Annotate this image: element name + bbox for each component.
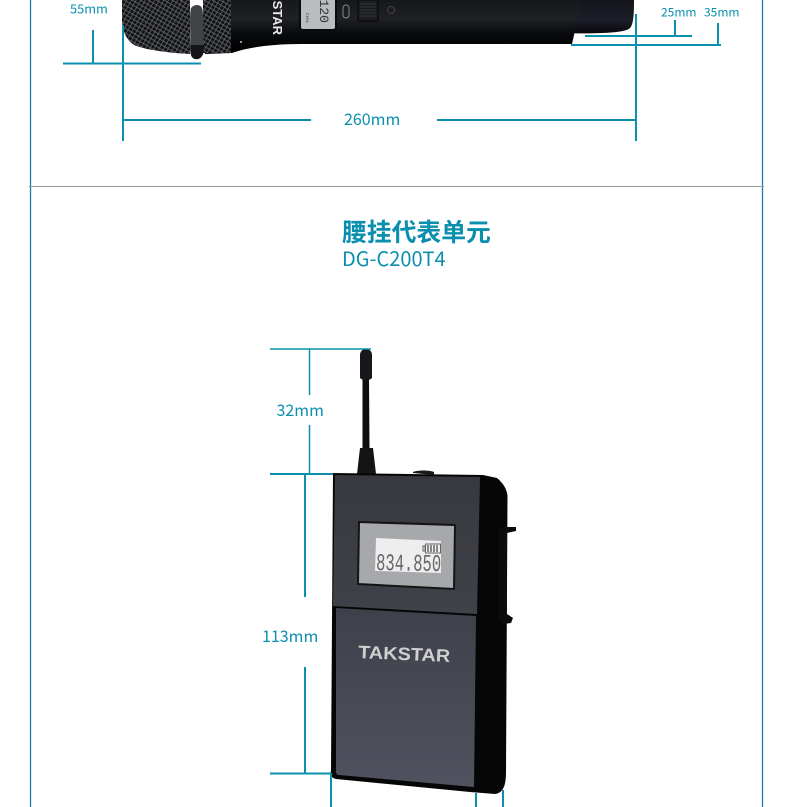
- microphone clasp: [190, 5, 204, 59]
- microphone handle: [205, 0, 582, 54]
- pack upper front: [333, 475, 480, 614]
- dimension: 260mm: [123, 14, 636, 141]
- heading: [342, 213, 491, 272]
- pack side: [331, 473, 508, 794]
- belt clip: [499, 527, 516, 624]
- LCD frequency: 834.850: [376, 551, 441, 579]
- LCD screen: [375, 538, 441, 573]
- dimension: 25mm: 25mm: [661, 4, 697, 20]
- LCD panel: [358, 522, 455, 589]
- dimension: 25mm: [585, 4, 697, 36]
- bodypack transmitter: [331, 349, 516, 794]
- LCD battery icon: [423, 544, 440, 553]
- microphone collar dot: [240, 41, 242, 43]
- dimension: 260mm: 260mm: [344, 106, 400, 130]
- dimension: 32mm: [270, 349, 371, 474]
- dimension: 35mm: 35mm: [704, 4, 740, 20]
- heading: 腰挂代表单元: [342, 213, 491, 249]
- microphone grille: [122, 0, 190, 54]
- microphone: [122, 0, 634, 59]
- microphone display: [300, 0, 336, 30]
- pack lower front: [336, 608, 476, 787]
- dimension: bottom ticks: [331, 773, 503, 807]
- dimension: 55mm: [63, 0, 201, 64]
- microphone display channel: CH01: [305, 13, 310, 24]
- antenna: [357, 349, 376, 474]
- pack top button: [413, 470, 434, 475]
- dimension: 113mm: [262, 474, 333, 774]
- dimension: 113mm: 113mm: [262, 623, 318, 647]
- dimension: 32mm: 32mm: [276, 397, 324, 421]
- dimension: 35mm: [571, 4, 740, 45]
- microphone buttons: [343, 0, 394, 21]
- heading: DG-C200T4: [342, 243, 446, 272]
- microphone end cap: [560, 0, 634, 33]
- brand logo: TAKSTAR: [358, 642, 451, 666]
